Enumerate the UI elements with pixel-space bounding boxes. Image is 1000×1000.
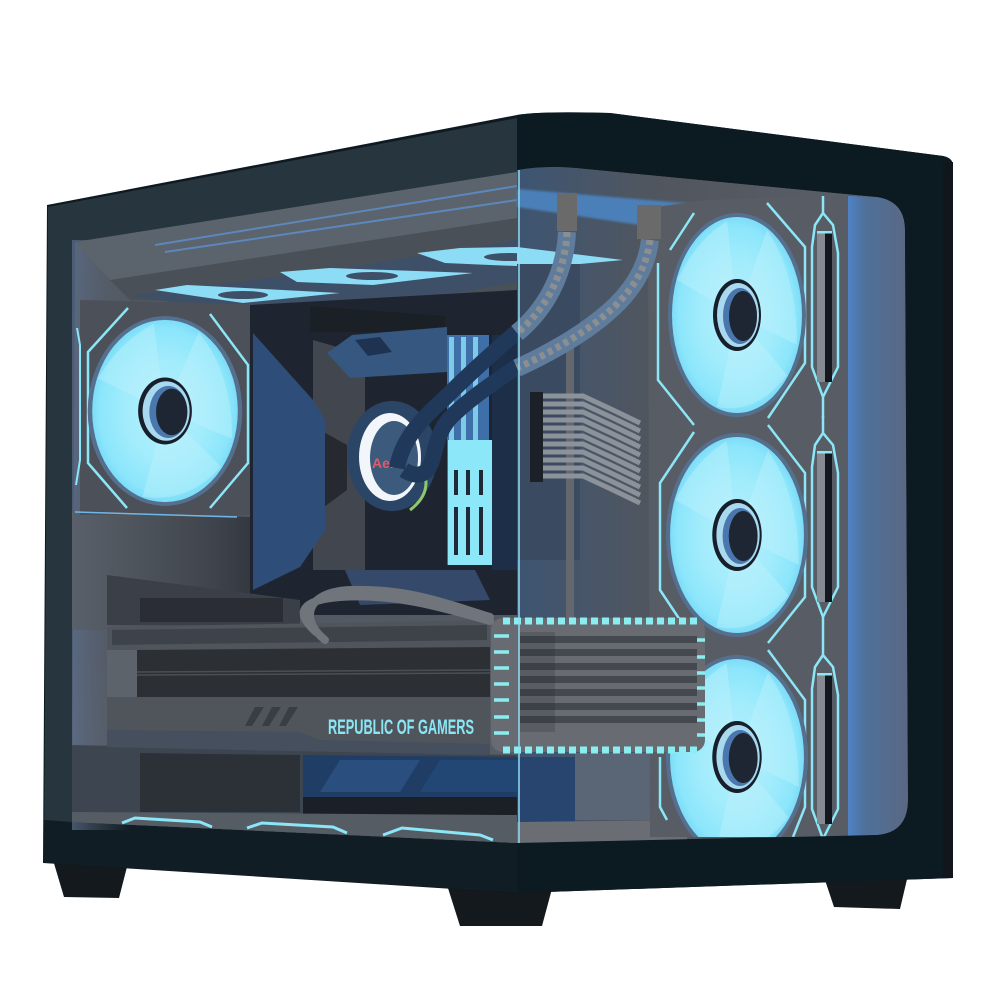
text: GPU branding: REPUBLIC OF GAMERS (328, 716, 474, 739)
cooling tubes through right view (517, 232, 650, 368)
cooling tubes inside left view (397, 331, 518, 475)
panel: left frame bottom band (44, 820, 517, 892)
GPU power cable (304, 590, 490, 640)
LED dashes left (494, 636, 509, 733)
floor plate (517, 820, 687, 843)
icon: left rear fan (75, 308, 248, 517)
lower chamber (72, 745, 517, 843)
grommet vertical tube (566, 340, 574, 620)
icon: top fan 2 (280, 268, 473, 285)
psu shroud (72, 512, 250, 630)
icon: bottom right fan (666, 655, 808, 837)
octagon light lines (658, 203, 805, 837)
icon: AIO pump head (347, 401, 437, 511)
icon: top fan 1 (155, 285, 340, 303)
panel: case body silhouette (43, 112, 953, 893)
motherboard rear dark strip (517, 264, 580, 560)
right fan array (658, 196, 838, 860)
text: pump logo: Aero (372, 455, 404, 471)
rear and io block (80, 300, 250, 515)
corner glass seam (518, 170, 520, 843)
cyan floor accents (122, 818, 493, 840)
icon: top right fan (668, 213, 806, 417)
light strips (812, 196, 838, 860)
icon: top fan 3 (417, 247, 517, 266)
fan mounting panel (648, 196, 848, 837)
upper radiator band (75, 172, 517, 280)
GPU end cap (491, 618, 705, 752)
left vent (107, 575, 300, 625)
panel: rear glowing wall (847, 196, 908, 836)
top radiator plate (130, 240, 517, 312)
panel: right interior (517, 167, 908, 843)
RAM sticks (447, 335, 517, 570)
blue side shroud (253, 333, 325, 590)
icon: middle right fan (666, 433, 808, 637)
GPU support heatsink (345, 570, 490, 605)
panel: left interior (72, 172, 517, 843)
fan hub shadows (218, 253, 536, 299)
icon: case feet (53, 860, 908, 926)
top fan reflection (517, 247, 623, 264)
VRM heatsink (310, 306, 447, 378)
graphics card (107, 620, 490, 755)
tube fittings (557, 193, 661, 239)
motherboard background (250, 290, 517, 615)
panel: right frame (517, 112, 953, 893)
panel: left smoked glass frame (44, 118, 517, 892)
side edge strip (943, 162, 953, 878)
LED dashes top and bottom (503, 621, 700, 750)
LED dashes right (697, 640, 705, 735)
icon: cyan side trim (76, 328, 80, 485)
lower bay (517, 757, 575, 825)
PSU cable comb (543, 396, 640, 503)
blue top plate (517, 189, 707, 225)
